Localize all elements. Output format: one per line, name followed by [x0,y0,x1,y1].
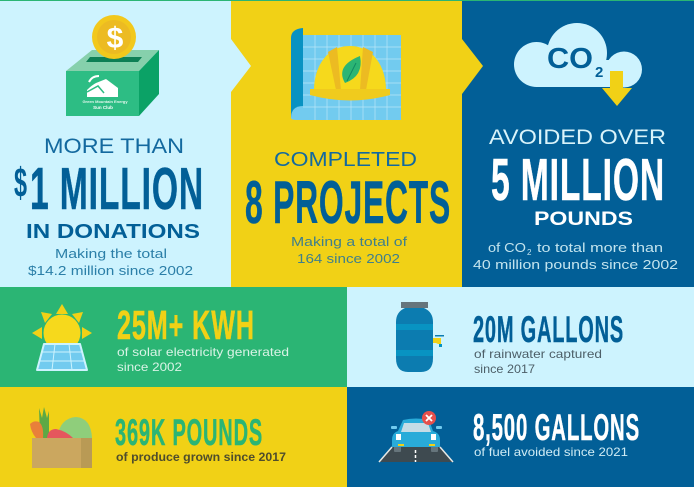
text: solar caption: of solar electricity generated [117,345,289,359]
panel: fuel [347,387,694,487]
heading: avoided over: AVOIDED OVER [489,126,666,149]
text: co2 total: 40 million pounds since 2002 [473,257,678,272]
arrow: yellow chevron [462,39,483,94]
top green strip [0,0,694,2]
text: rainwater caption: of rainwater captured [474,347,602,361]
arrow: light chevron [231,39,251,92]
icon: rain barrel [396,302,444,372]
text: projects total: Making a total of [291,234,407,249]
heading: more than: MORE THAN [44,135,184,158]
text: rainwater caption [474,347,602,376]
icon: blueprint and hard hat [291,28,401,120]
panel: donations [0,1,232,287]
text: co2 total: to total more than [537,240,663,255]
text: projects total [291,234,407,266]
text: co2 total: of CO [488,240,526,255]
text: donations total: $14.2 million since 2002 [28,263,193,278]
text: solar caption [117,345,289,374]
panel: rainwater [347,287,694,387]
panel: solar [0,287,347,387]
text: co2 total [473,240,678,272]
heading: completed: COMPLETED [274,149,417,171]
text: donations total: Making the total [55,246,167,261]
figure: 25m+ kwh: 25M+ KWH [117,302,255,348]
icon: donation box with coin [66,15,159,116]
heading: in donations: IN DONATIONS [26,220,200,243]
icon: co2 cloud [514,23,642,106]
panel: co2 [462,1,694,287]
heading: pounds: POUNDS [534,209,633,230]
icon: co2 cloud: CO [547,43,593,75]
icon: bag of produce [30,407,92,468]
text: co2 total: 2 [527,248,532,257]
text: projects total: 164 since 2002 [297,251,400,266]
figure: $1 million: $ [14,159,27,206]
figure: $1 million: 1 MILLION [30,156,204,222]
icon: co2 cloud: 2 [595,64,603,81]
panel: projects [231,1,463,287]
icon: sun and solar panel [32,304,92,370]
figure: $1 million [14,156,204,222]
text: fuel caption: of fuel avoided since 2021 [474,445,628,459]
icon: car on road [379,411,453,462]
figure: 369k pounds: 369K POUNDS [115,412,263,453]
text: donations total [28,246,193,278]
icon: donation box with coin: $ [107,22,124,55]
panel: produce [0,387,347,487]
text: solar caption: since 2002 [117,360,182,374]
text: rainwater caption: since 2017 [474,362,535,376]
icon: donation box with coin: Sun Club [93,105,113,110]
icon: donation box with coin: Green Mountain Energy [82,99,128,104]
text: produce caption: of produce grown since 2017 [116,450,286,464]
figure: 8 projects: 8 PROJECTS [245,169,451,236]
